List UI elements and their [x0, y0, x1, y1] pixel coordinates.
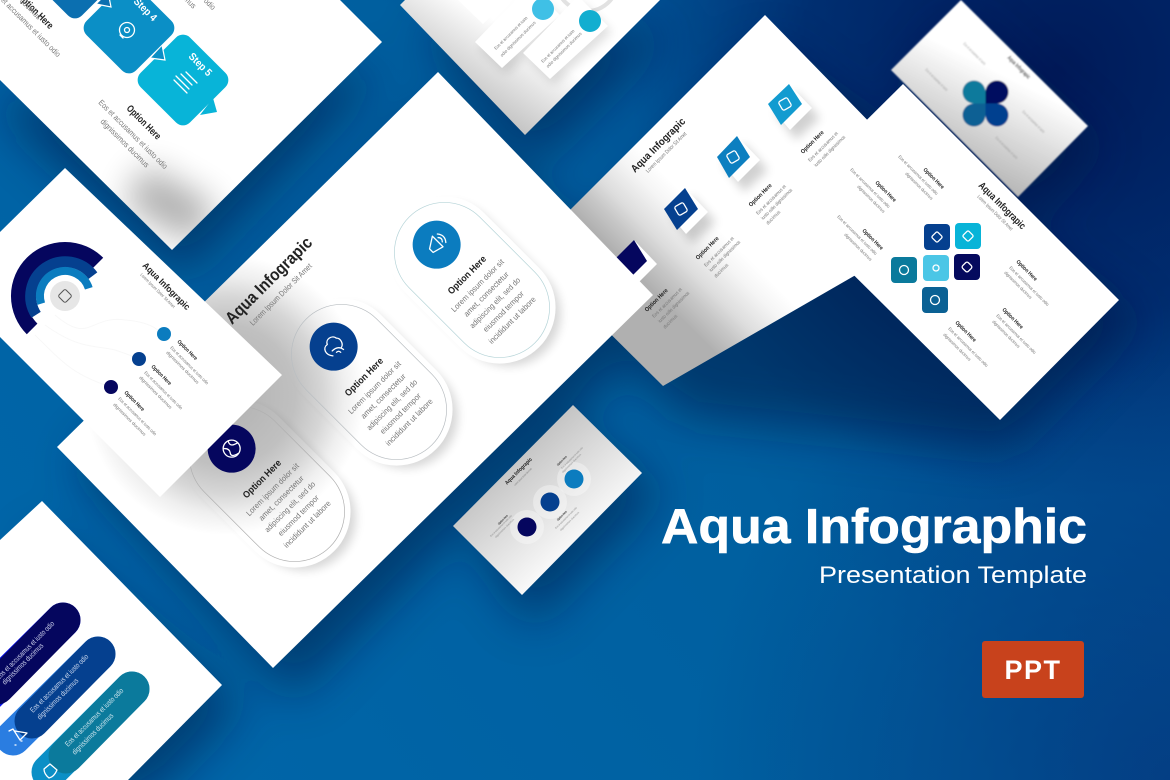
heading: Aqua Infograpic [504, 457, 534, 486]
option labels: Option Here [800, 130, 826, 155]
tile cluster [891, 223, 981, 313]
option labels: Option Here [644, 288, 670, 313]
blurred labels [924, 41, 1046, 160]
option item navy: Eos et accusamus et iusto odio [117, 396, 158, 437]
pill: blue option: Option Here [343, 356, 386, 399]
heading: Lorem Ipsum Dolor Sit Amet [248, 261, 314, 327]
option text upper right [145, 0, 218, 12]
tiny option labels: dignissimos ducimus [560, 511, 581, 532]
option labels: Option Here [748, 183, 774, 208]
icon: globe [220, 437, 244, 461]
tiny option labels [490, 446, 584, 539]
pill: light blue option [365, 173, 584, 392]
slide: small three circles [453, 405, 642, 595]
subtitle: Presentation Template [819, 562, 1087, 589]
option labels: Eos et accusamus et iusto odio [1008, 265, 1050, 307]
faint connector lines [35, 315, 160, 386]
blurred labels: Eos et accusamus et iusto [962, 41, 987, 66]
slide: main three option pills [57, 72, 653, 668]
pill: light blue option: adipiscing elit, sed do [468, 275, 523, 330]
pill: blue option: Lorem ipsum dolor sit [346, 359, 403, 416]
heading: Aqua Infograpic [629, 116, 688, 175]
option labels: dignissimos ducimus [843, 232, 873, 262]
heading: Lorem Ipsum Dolor Sit Amet [976, 194, 1014, 233]
step 3 bubble [26, 0, 124, 22]
option labels: Eos et accusamus et iusto odio [849, 167, 891, 209]
blurred labels: Eos et accusamus et iusto [994, 135, 1019, 160]
option item navy [104, 380, 158, 437]
pill: navy option: eiusmod tempor [276, 493, 321, 538]
semicircle chart [18, 249, 98, 329]
card right: odio dignissimos ducimus [545, 31, 583, 69]
bar navy: dignissimos ducimus [0, 641, 45, 686]
option item blue [132, 352, 184, 411]
diamond 4 [613, 240, 657, 286]
card middle: odio dignissimos ducimus [499, 20, 537, 58]
circle blue [533, 485, 567, 519]
diamond 1 [768, 84, 820, 140]
tiny option labels: Option Here [497, 514, 509, 526]
blurred labels: Eos et accusamus et iusto [924, 67, 949, 92]
step 5 bubble: Step 5 [186, 51, 214, 79]
pill: light blue option: Lorem ipsum dolor sit [449, 257, 506, 314]
option labels: Option Here [1001, 307, 1024, 331]
bar teal [44, 686, 132, 778]
blurred labels: Eos et accusamus et iusto [1021, 109, 1046, 134]
tiny option labels: Eos et accusamus et iusto odio [555, 506, 578, 530]
slide: diamond icons row [528, 15, 960, 386]
slide: top center cards [400, 0, 660, 135]
icon: shield [44, 764, 57, 778]
option text lower: dignissimos ducimus [99, 117, 151, 169]
pill: navy option: Option Here [241, 458, 284, 501]
option item light blue [157, 327, 210, 386]
slide: blurred petal slide top right [891, 0, 1088, 197]
step 4 bubble [80, 0, 178, 77]
option labels: iusto odio dignissimos [657, 290, 691, 324]
option labels: Eos et accusamus et iusto odio [897, 154, 939, 196]
pill: blue option: eiusmod tempor [378, 391, 423, 436]
option labels: Eos et accusamus et [651, 287, 684, 319]
shadow patch at slide corner [135, 185, 205, 225]
pill: blue option: amet, consectetur [359, 372, 408, 421]
pill: navy option: adipiscing elit, sed do [263, 479, 318, 534]
tiny option labels: dignissimos ducimus [562, 453, 583, 474]
diamond 2 [717, 136, 768, 192]
tiny option labels: dignissimos ducimus [495, 518, 516, 539]
option item blue: Eos et accusamus et iusto odio [143, 370, 184, 411]
option item light blue: dignissimos ducimus [165, 350, 201, 385]
option labels: ducimus [662, 313, 679, 330]
option item navy: dignissimos ducimus [112, 402, 148, 437]
pill: light blue option: eiusmod tempor [481, 289, 526, 334]
option labels: Option Here [1015, 259, 1038, 283]
heading: Lorem Ipsum Dolor Sit Amet [514, 467, 533, 487]
title: Aqua Infographic [661, 500, 1087, 554]
heading: Lorem Ipsum Dolor Sit Amet [645, 131, 689, 174]
option labels: Eos et accusamus et iusto odio [995, 313, 1037, 355]
option text lower: Eos et accusamus et iusto odio [97, 98, 170, 171]
bar blue [9, 652, 98, 745]
heading: Aqua Infograpic [141, 260, 192, 312]
heading: Lorem Ipsum Dolor Sit Amet [139, 272, 176, 309]
tiny option labels: Option Here [556, 510, 568, 522]
petal cluster [963, 80, 1009, 126]
option labels: Option Here [874, 180, 897, 204]
option labels: ducimus [765, 209, 782, 226]
option labels: ducimus [713, 262, 730, 279]
card right [523, 0, 612, 85]
PPT badge [982, 641, 1084, 698]
pill: light blue option: incididunt ut labore [487, 294, 538, 346]
icon: list [174, 72, 197, 93]
option labels [836, 154, 1050, 368]
pill: blue option [262, 275, 481, 494]
option labels: Option Here [954, 320, 977, 344]
option labels: iusto odio dignissimos [813, 134, 847, 168]
bar blue: Eos et accusamus et iusto odio [28, 652, 90, 714]
pill: blue option: incididunt ut labore [384, 396, 435, 448]
heading: Aqua Infograpic [221, 233, 316, 328]
slide: square tile cluster [782, 84, 1119, 420]
bar blue: dignissimos ducimus [35, 676, 80, 721]
slide: bottom left colored bars [0, 501, 222, 780]
PPT badge: PPT [1004, 655, 1062, 685]
option labels: Eos et accusamus et [755, 184, 788, 216]
option labels: Option Here [922, 167, 945, 191]
option item navy: Option Here [123, 390, 145, 413]
option labels: dignissimos ducimus [904, 171, 934, 201]
tiny option labels: Eos et accusamus et iusto odio [561, 446, 584, 470]
blurred labels: Aqua Infograpic [1006, 55, 1031, 81]
option item light blue: Option Here [176, 339, 198, 362]
option labels: Eos et accusamus et iusto odio [836, 214, 878, 256]
option labels: Option Here [861, 228, 884, 252]
circle light blue [557, 462, 591, 496]
pill: navy option [160, 377, 379, 596]
heading: Aqua Infograpic [976, 180, 1028, 232]
circle navy [510, 510, 544, 544]
option labels: dignissimos ducimus [991, 319, 1021, 349]
option labels: dignissimos ducimus [1003, 270, 1033, 300]
icon: webcam [120, 22, 134, 38]
option labels: Eos et accusamus et [703, 236, 736, 268]
pill: navy option: amet, consectetur [257, 474, 306, 523]
pill: blue option: adipiscing elit, sed do [365, 377, 420, 432]
option labels: iusto odio dignissimos [708, 239, 742, 273]
icon: speaker [425, 231, 448, 255]
option labels: Option Here [695, 236, 721, 261]
option labels: Eos et accusamus et [807, 131, 840, 163]
pill: navy option: incididunt ut labore [282, 498, 333, 550]
option labels [644, 130, 847, 330]
slide: left semicircle chart [0, 168, 282, 497]
card left [455, 0, 530, 24]
option labels: Eos et accusamus et iusto odio [947, 326, 989, 368]
pill: light blue option: amet, consectetur [462, 270, 511, 319]
diamond 3 [664, 188, 716, 244]
option labels: iusto odio dignissimos [760, 187, 794, 221]
card middle [475, 0, 564, 74]
option item blue: Option Here [150, 364, 172, 387]
option text lower: Option Here [124, 103, 163, 142]
pill: navy option: Lorem ipsum dolor sit [244, 461, 301, 518]
option item light blue: Eos et accusamus et iusto odio [169, 345, 210, 386]
icon: cart [9, 729, 27, 745]
option labels: dignissimos ducimus [856, 184, 886, 214]
ring fragment [556, 0, 618, 11]
slide: five step speech bubbles [0, 0, 382, 250]
tiny option labels: Option Here [556, 455, 568, 467]
option item blue: dignissimos ducimus [138, 375, 174, 410]
card middle: Eos et accusamus et iusto [493, 15, 529, 51]
pill: light blue option: Option Here [446, 254, 489, 297]
bar teal: Eos et accusamus et iusto odio [63, 686, 125, 748]
card right: Eos et accusamus et iusto [540, 28, 576, 64]
tiny option labels: Eos et accusamus et iusto odio [490, 514, 513, 538]
icon: cloud wifi [320, 333, 347, 360]
option labels: dignissimos ducimus [942, 332, 972, 362]
step 5 bubble [134, 31, 232, 129]
bar teal: dignissimos ducimus [70, 711, 115, 756]
bar navy [0, 619, 63, 704]
